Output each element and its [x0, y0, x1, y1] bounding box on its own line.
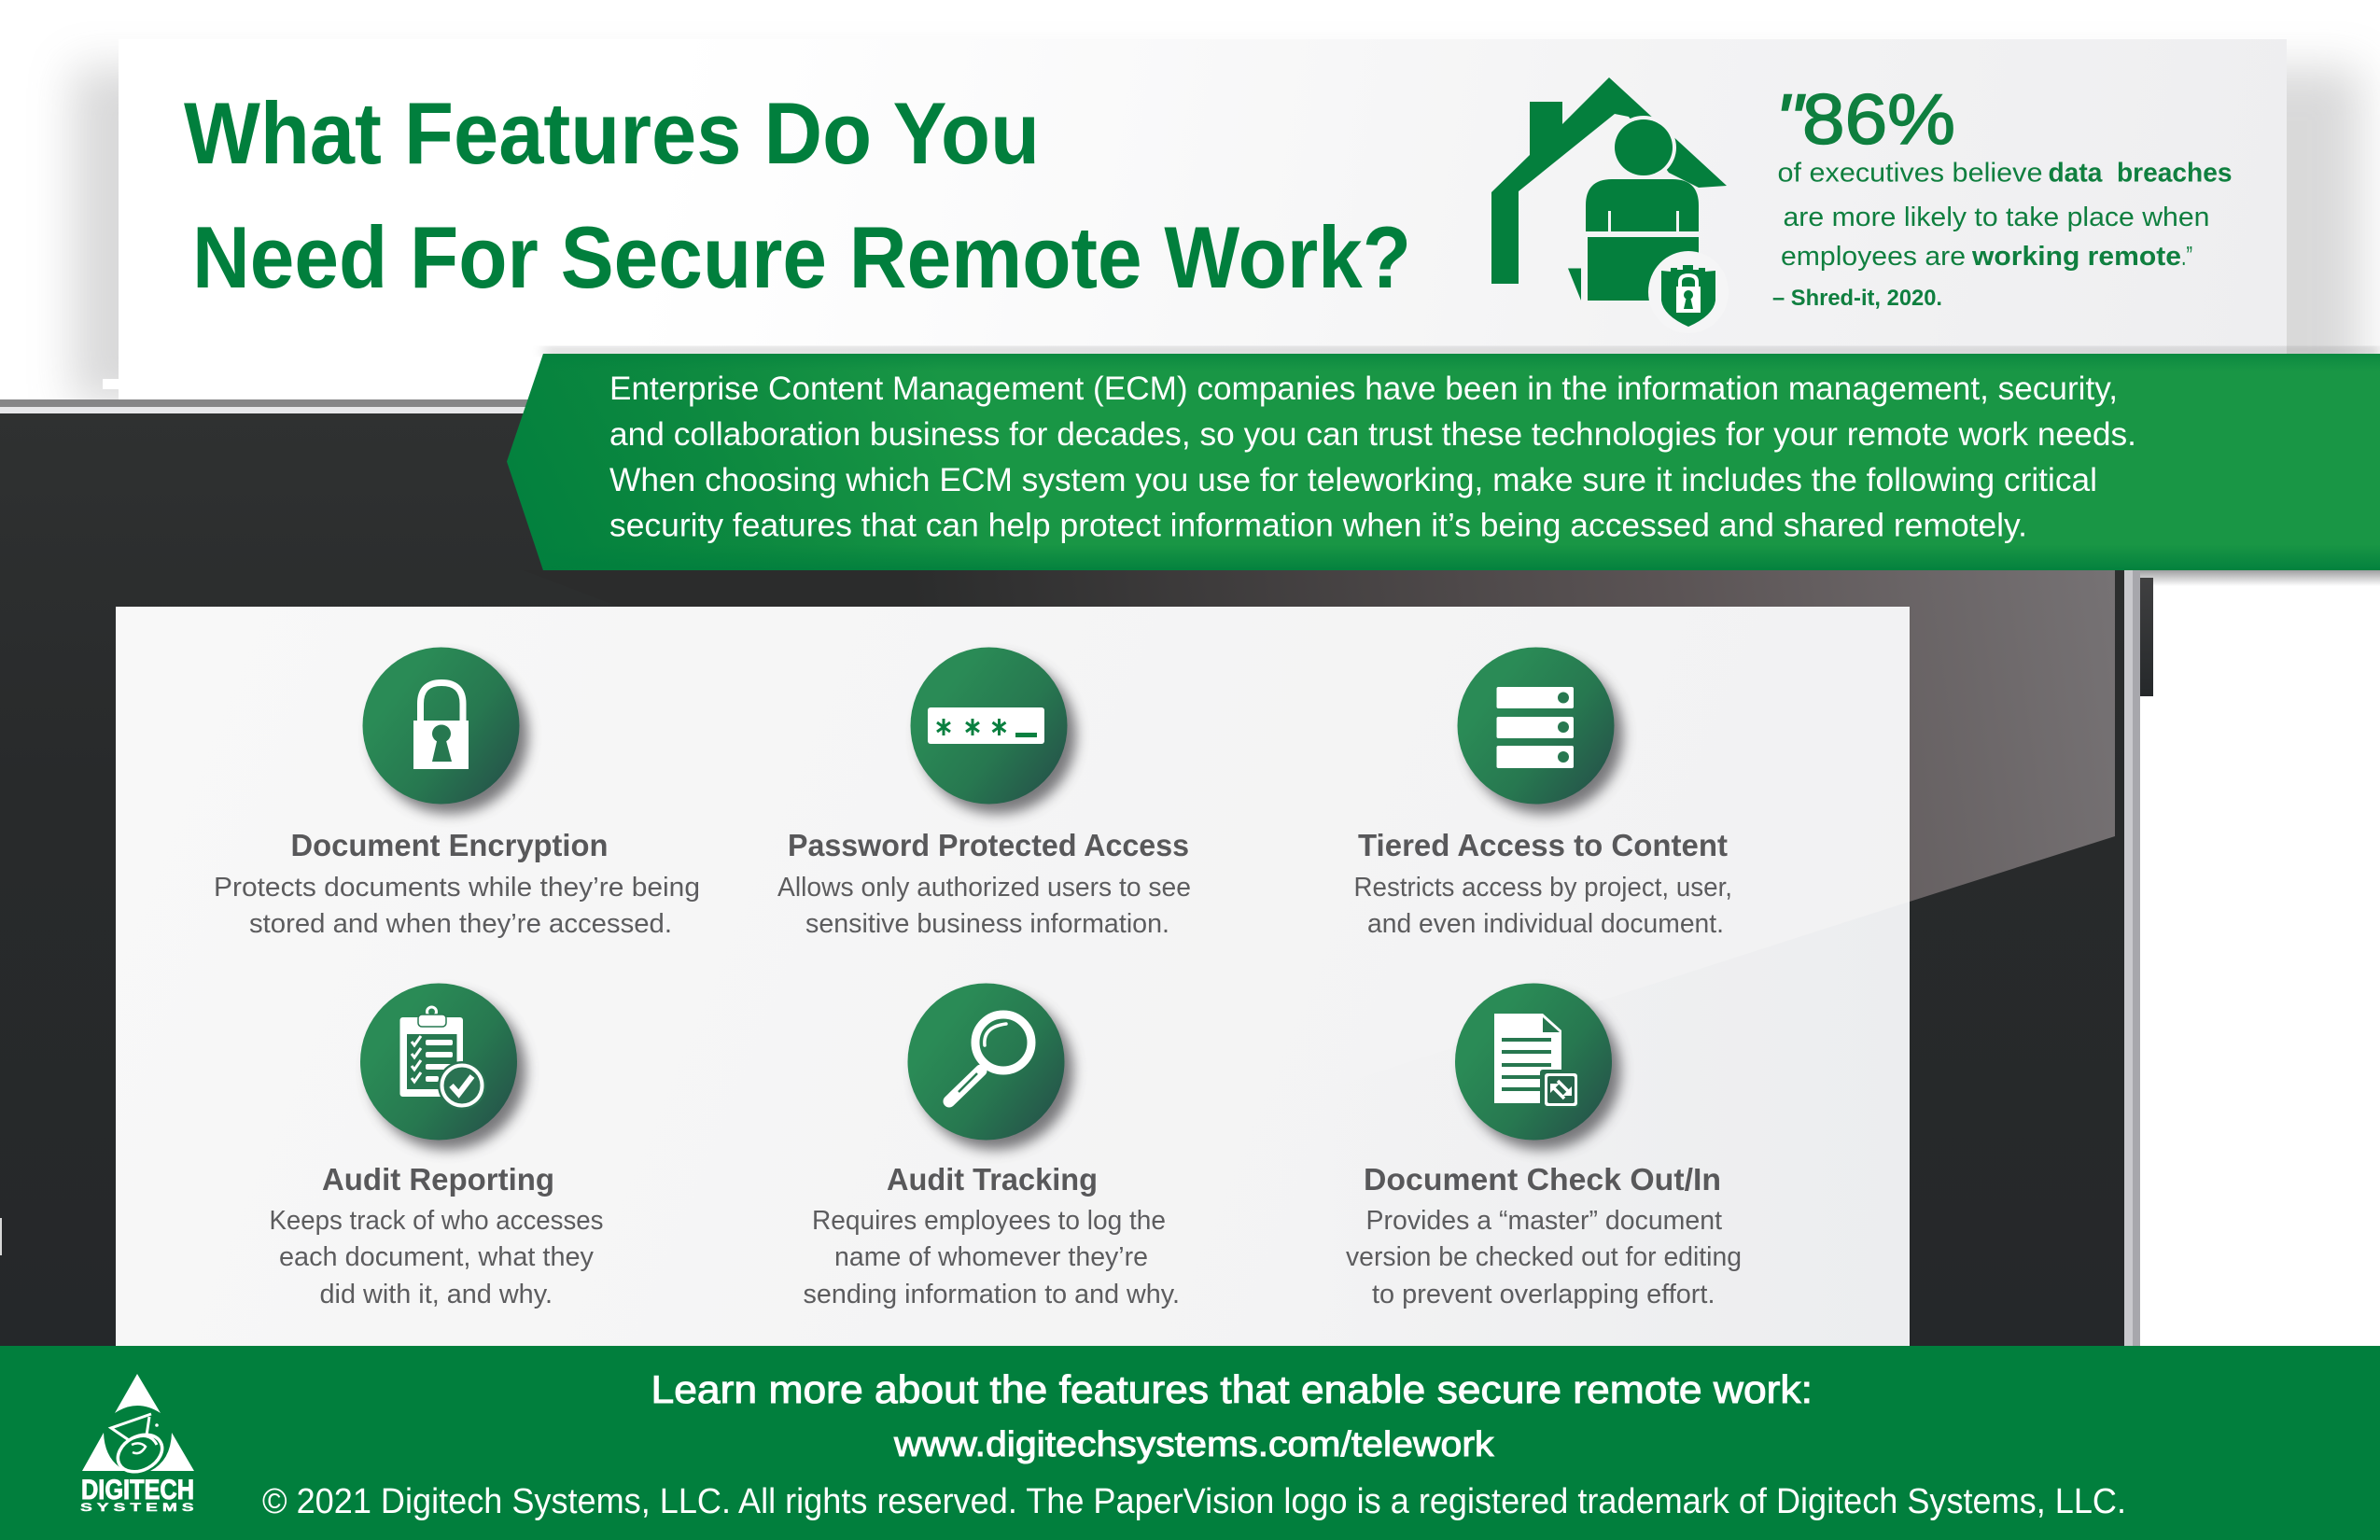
- monitor silver edge: [2124, 566, 2140, 1346]
- feature: tiered access to content: [1353, 648, 1732, 939]
- description: Allows only authorized users to see: [777, 873, 1191, 903]
- description: [269, 1206, 603, 1309]
- statistic quote: "86%: [1775, 80, 1955, 160]
- monitor side tab: [2140, 578, 2153, 696]
- description: to prevent overlapping effort.: [1372, 1280, 1715, 1309]
- title: [184, 84, 1411, 306]
- logo: Digitech Systems: [80, 1374, 194, 1514]
- icon: document with swap arrows: [1455, 984, 1620, 1150]
- description: Restricts access by project, user,: [1353, 873, 1732, 903]
- statistic quote: .”: [2181, 242, 2192, 272]
- title: Need For Secure Remote Work?: [192, 208, 1411, 306]
- intro text: [609, 371, 2136, 543]
- description: [803, 1206, 1180, 1309]
- shadow under ribbon at right: [2140, 569, 2380, 586]
- description: [777, 873, 1191, 939]
- call to action: Learn more about the features that enable secure remote work:: [651, 1367, 1813, 1411]
- statistic quote: [1772, 80, 2233, 311]
- description: [1353, 873, 1732, 939]
- feature: password protected access: [777, 648, 1191, 939]
- description: Keeps track of who accesses: [269, 1206, 603, 1236]
- heading: Password Protected Access: [788, 828, 1189, 862]
- statistic quote: are more likely to take place when: [1783, 203, 2210, 232]
- intro text: and collaboration business for decades, so you can trust these technologies for your remote work needs.: [609, 416, 2136, 453]
- heading: Audit Tracking: [887, 1162, 1098, 1197]
- description: Provides a “master” document: [1366, 1206, 1722, 1236]
- statistic quote: employees are: [1781, 242, 1966, 272]
- logo: Digitech Systems: SYSTEMS: [80, 1502, 194, 1514]
- small notch on left edge: [0, 1218, 2, 1255]
- intro text: When choosing which ECM system you use for teleworking, make sure it includes the following critical: [609, 462, 2097, 498]
- url: www.digitechsystems.com/telework: [893, 1425, 1495, 1464]
- description: Protects documents while they’re being: [214, 873, 700, 903]
- header divider strip: [0, 379, 560, 413]
- description: [1346, 1206, 1742, 1309]
- header panel shadow: [73, 67, 2361, 404]
- description: stored and when they’re accessed.: [249, 909, 672, 939]
- heading: Document Encryption: [291, 828, 609, 862]
- description: version be checked out for editing: [1346, 1242, 1742, 1272]
- feature: audit reporting: [269, 984, 603, 1309]
- statistic quote: – Shred-it, 2020.: [1772, 286, 1942, 311]
- dark monitor background: [0, 413, 2124, 1346]
- description: name of whomever they’re: [834, 1242, 1148, 1272]
- icon: remote worker in house with security shield: [1491, 77, 1729, 333]
- copyright: © 2021 Digitech Systems, LLC. All rights reserved. The PaperVision logo is a registered trademark of Digitech Systems, LLC.: [262, 1482, 2126, 1521]
- description: sending information to and why.: [803, 1280, 1180, 1309]
- features panel: [116, 607, 1910, 1346]
- icon: password field: [911, 648, 1076, 814]
- header panel: [119, 39, 2287, 399]
- heading: Tiered Access to Content: [1358, 828, 1728, 862]
- icon: padlock: [362, 648, 528, 814]
- green intro ribbon: [507, 354, 2380, 570]
- logo: Digitech Systems: DIGITECH: [81, 1475, 194, 1505]
- description: each document, what they: [279, 1242, 594, 1272]
- description: did with it, and why.: [319, 1280, 553, 1309]
- icon: server stack: [1458, 648, 1623, 814]
- feature: audit tracking: [803, 984, 1180, 1309]
- intro text: security features that can help protect information when it’s being accessed and shared remotely.: [609, 508, 2027, 543]
- description: and even individual document.: [1367, 909, 1724, 939]
- statistic quote: data breaches: [2048, 159, 2233, 189]
- heading: Document Check Out/In: [1364, 1162, 1721, 1197]
- statistic quote: of executives believe: [1777, 159, 2042, 189]
- description: [214, 873, 700, 939]
- feature: document check out/in: [1346, 984, 1742, 1309]
- footer band: [0, 1346, 2380, 1540]
- monitor screen reflection: [523, 570, 2115, 902]
- intro text: Enterprise Content Management (ECM) companies have been in the information management, security,: [609, 371, 2118, 407]
- description: Requires employees to log the: [812, 1206, 1166, 1236]
- title: What Features Do You: [184, 84, 1040, 182]
- statistic quote: working remote: [1971, 242, 2181, 272]
- ribbon shadow: [543, 348, 2380, 355]
- heading: Audit Reporting: [322, 1162, 554, 1197]
- icon: clipboard checklist: [360, 984, 526, 1150]
- feature: document encryption: [214, 648, 700, 939]
- icon: magnifying glass: [907, 984, 1073, 1150]
- description: sensitive business information.: [805, 909, 1169, 939]
